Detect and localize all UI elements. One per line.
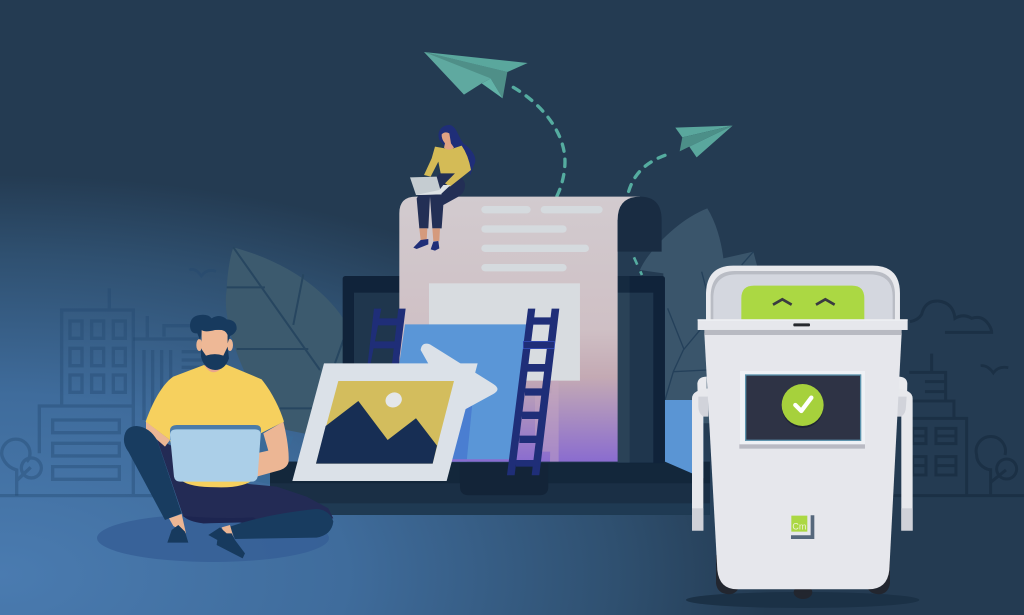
robot lid <box>706 266 900 322</box>
man face <box>202 330 228 359</box>
document roll <box>618 197 662 252</box>
ladder selection handle <box>523 341 554 349</box>
man shoes <box>167 525 245 558</box>
robot body <box>704 333 902 589</box>
laptop <box>270 276 710 515</box>
robot left arm <box>697 377 707 415</box>
robot logo <box>791 515 814 539</box>
ladder ghost shadow <box>535 381 559 462</box>
document image block <box>429 283 580 381</box>
city skyline left <box>0 269 216 496</box>
leaf right <box>640 208 760 423</box>
laptop base <box>270 462 710 515</box>
man ankles <box>169 514 234 539</box>
man left arm <box>146 422 170 447</box>
woman sitting on document <box>410 125 475 251</box>
document text lines <box>481 206 603 271</box>
robot screen <box>740 371 865 445</box>
woman legs <box>417 173 465 228</box>
paper plane large <box>424 52 528 98</box>
man laptop <box>170 425 261 440</box>
woman hair <box>438 125 475 176</box>
paper plane small <box>675 126 733 157</box>
laptop blue side panel <box>665 400 703 478</box>
video panel <box>385 324 528 462</box>
laptop notch <box>460 463 548 495</box>
robot: Cm <box>792 521 806 531</box>
robot rim <box>698 319 908 330</box>
man far leg <box>157 438 333 525</box>
man with laptop <box>97 315 333 562</box>
woman laptop <box>410 177 442 195</box>
document <box>399 197 662 462</box>
dashes near roll <box>634 257 642 275</box>
city skyline right <box>893 301 1024 496</box>
photo card <box>292 363 478 481</box>
ladder left <box>367 309 406 367</box>
robot wheels <box>716 555 890 599</box>
robot right arm <box>898 377 907 415</box>
dashed flight path right <box>627 155 665 197</box>
ladder right <box>507 309 559 475</box>
play button <box>421 344 497 414</box>
man near leg <box>124 426 182 520</box>
robot shadow <box>686 592 919 608</box>
dashed flight path left <box>513 87 665 197</box>
woman face <box>442 132 454 150</box>
photo sky <box>316 381 454 464</box>
man right arm <box>257 422 289 477</box>
man ears <box>196 339 202 351</box>
man shirt <box>146 364 284 487</box>
photo sun <box>383 390 404 410</box>
woman feet <box>419 228 440 241</box>
man neck <box>204 360 225 377</box>
photo mountains <box>316 401 437 464</box>
man ground shadow <box>97 514 329 562</box>
laptop screen frame <box>343 276 665 463</box>
leaf lower blue shade <box>253 430 293 486</box>
robot eyes <box>773 299 835 305</box>
woman shoes <box>413 239 439 251</box>
man beard <box>201 347 229 370</box>
robot <box>686 266 919 608</box>
leaf left <box>226 247 350 486</box>
robot check badge <box>782 387 823 428</box>
woman sweater <box>424 146 471 187</box>
man hair <box>190 315 237 343</box>
robot face <box>741 286 864 320</box>
